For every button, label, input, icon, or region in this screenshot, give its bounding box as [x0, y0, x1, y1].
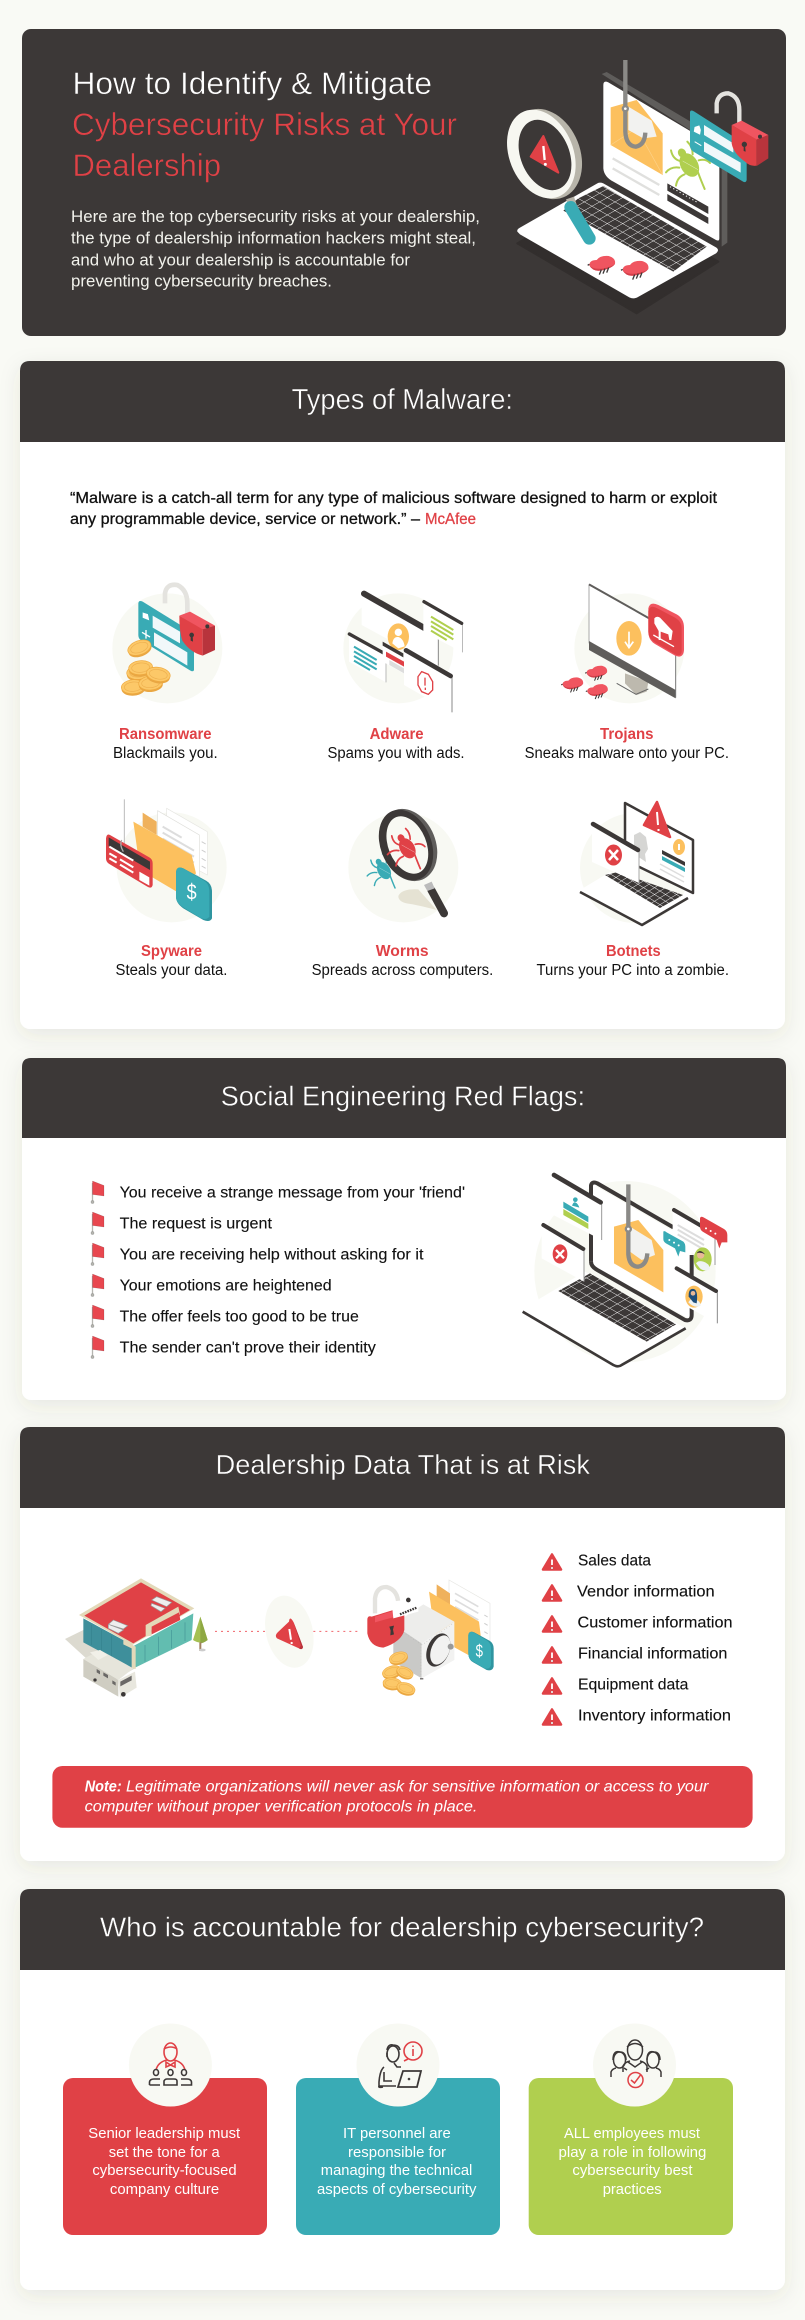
- callout: note: Note:: [85, 1779, 122, 1796]
- hero intro text: preventing cybersecurity breaches.: [71, 273, 332, 291]
- label: adware: [328, 726, 464, 762]
- panel: hero: [22, 29, 786, 336]
- card text: IT personnel: responsible for: [348, 2144, 446, 2161]
- quote: “Malware is a catch-all term for any type of malicious software designed to harm or exploit: [70, 490, 718, 507]
- card text: IT personnel: [317, 2125, 477, 2198]
- illustration: dealership to warning to data: [65, 1578, 494, 1698]
- card: senior leadership: [63, 2024, 267, 2235]
- quote: McAfee: [425, 511, 476, 528]
- card text: senior leadership: Senior leadership must: [88, 2125, 241, 2142]
- card text: all employees: ALL employees must: [564, 2125, 701, 2142]
- label: worms: [312, 943, 493, 979]
- list: data types: Inventory information: [578, 1708, 731, 1725]
- label: spyware: Steals your data.: [116, 962, 227, 979]
- card text: all employees: [558, 2125, 706, 2198]
- section header: types of malware: [20, 361, 785, 442]
- card text: all employees: practices: [603, 2181, 662, 2198]
- icon: senior leader with team: [150, 2043, 192, 2085]
- card text: IT personnel: managing the technical: [321, 2162, 472, 2179]
- quote: any programmable device, service or network.” –: [70, 511, 420, 528]
- card text: senior leadership: cybersecurity-focused: [92, 2162, 237, 2179]
- icon: adware: [343, 593, 463, 712]
- hero title: Dealership: [72, 147, 221, 183]
- panel: who is accountable: [20, 1889, 785, 2290]
- label: spyware: [116, 943, 227, 979]
- callout: note: computer without proper verification protocols in place.: [85, 1799, 477, 1816]
- label: botnets: [536, 943, 729, 979]
- section header: types of malware: Types of Malware:: [292, 384, 513, 416]
- list: red flags: Your emotions are heightened: [120, 1278, 332, 1295]
- label: worms: Spreads across computers.: [312, 962, 493, 979]
- card text: IT personnel: IT personnel are: [343, 2125, 451, 2142]
- label: botnets: Botnets: [606, 943, 661, 960]
- card text: senior leadership: [88, 2125, 241, 2198]
- card text: all employees: play a role in following: [558, 2144, 706, 2161]
- icon: botnets: [580, 802, 693, 925]
- list: red flags: The offer feels too good to be true: [120, 1309, 359, 1326]
- icon: team with check: [611, 2040, 661, 2088]
- panel: types of malware: [20, 361, 785, 1029]
- label: trojans: [525, 726, 729, 762]
- hero intro text: [71, 208, 480, 291]
- illustration: dealership to warning to data: $: [476, 1641, 483, 1661]
- hero title: How to Identify & Mitigate: [72, 65, 432, 101]
- section header: accountability: Who is accountable for dealership cybersecurity?: [100, 1912, 704, 1943]
- quote: [70, 490, 718, 528]
- icon: ransomware: [112, 585, 222, 703]
- card: IT personnel: [296, 2024, 500, 2235]
- section header: red flags: [22, 1058, 786, 1138]
- panel: dealership data at risk: [20, 1427, 785, 1861]
- card text: all employees: cybersecurity best: [572, 2162, 693, 2179]
- icon: trojans: [561, 584, 684, 703]
- section header: red flags: Social Engineering Red Flags:: [221, 1081, 585, 1112]
- list: data types: Sales data: [578, 1553, 651, 1570]
- label: trojans: Sneaks malware onto your PC.: [525, 745, 729, 762]
- card text: senior leadership: set the tone for a: [109, 2144, 220, 2161]
- list: data types: Customer information: [578, 1615, 732, 1632]
- list: red flags: You receive a strange message from your 'friend': [120, 1185, 465, 1202]
- hero title: [72, 65, 457, 183]
- callout: note: [52, 1766, 753, 1828]
- callout: note: Legitimate organizations will never ask for sensitive information or access to your: [126, 1779, 709, 1796]
- icon: IT person with laptop: [379, 2042, 422, 2087]
- hero intro text: the type of dealership information hackers might steal,: [71, 230, 476, 248]
- card: all employees: [529, 2024, 733, 2235]
- list: data types: Vendor information: [577, 1584, 715, 1601]
- list: data types: Financial information: [578, 1646, 727, 1663]
- card text: IT personnel: aspects of cybersecurity: [317, 2181, 477, 2198]
- label: ransomware: Ransomware: [119, 726, 212, 743]
- label: adware: Spams you with ads.: [328, 745, 464, 762]
- section header: data at risk: [20, 1427, 785, 1508]
- hero intro text: Here are the top cybersecurity risks at your dealership,: [71, 208, 480, 226]
- label: trojans: Trojans: [600, 726, 654, 743]
- label: adware: Adware: [370, 726, 424, 743]
- label: ransomware: Blackmails you.: [113, 745, 218, 762]
- section header: data at risk: Dealership Data That is at Risk: [216, 1449, 591, 1480]
- label: spyware: Spyware: [141, 943, 202, 960]
- list: data types: [543, 1553, 732, 1725]
- list: red flags: The request is urgent: [120, 1216, 273, 1233]
- icon: spyware: [106, 799, 227, 922]
- label: worms: Worms: [376, 943, 429, 960]
- icon: spyware: $: [187, 879, 197, 904]
- hero intro text: and who at your dealership is accountable for: [71, 252, 411, 270]
- list: data types: Equipment data: [578, 1677, 689, 1694]
- card text: senior leadership: company culture: [110, 2181, 219, 2198]
- hero title: Cybersecurity Risks at Your: [72, 106, 457, 142]
- list: red flags: You are receiving help without asking for it: [120, 1247, 424, 1264]
- icon: worms: [348, 800, 458, 922]
- label: ransomware: [113, 726, 218, 762]
- section header: accountability: [20, 1889, 785, 1970]
- icon: phishing laptop with windows: [522, 1175, 727, 1367]
- icon: hero laptop with hook, magnifier and lock: [494, 60, 768, 313]
- panel: social engineering red flags: [22, 1058, 786, 1400]
- label: botnets: Turns your PC into a zombie.: [536, 962, 729, 979]
- list: red flags: The sender can't prove their identity: [120, 1340, 376, 1357]
- list: red flags: [91, 1181, 465, 1359]
